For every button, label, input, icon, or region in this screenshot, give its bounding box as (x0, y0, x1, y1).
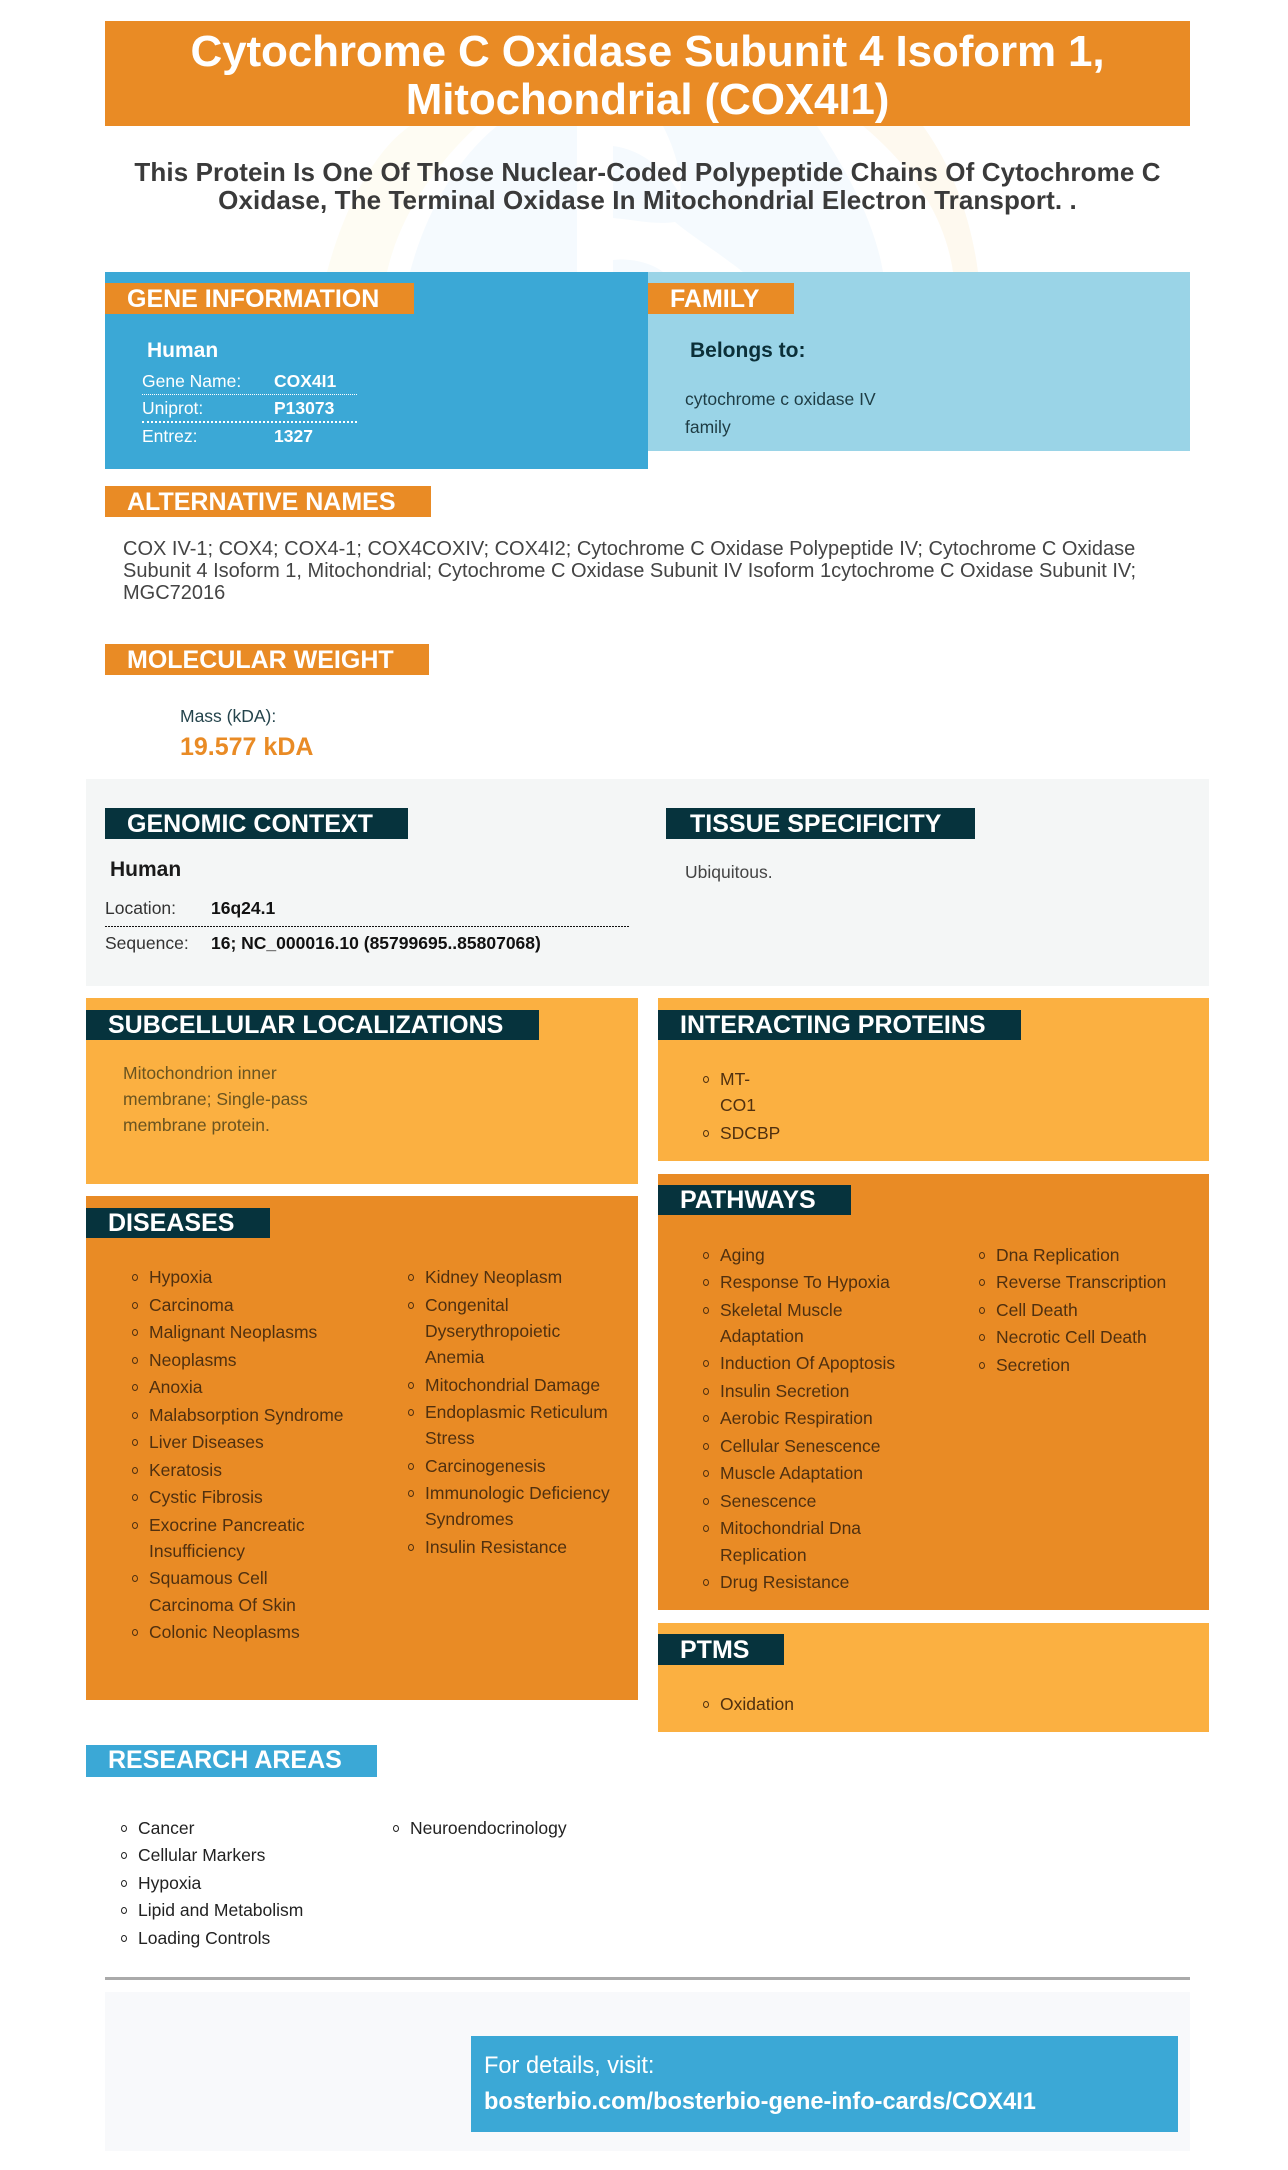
pathway list: Adaptation (720, 1326, 804, 1346)
panel: diseases (86, 1196, 638, 1700)
uniprot row: P13073 (274, 398, 334, 418)
panel: interacting proteins (658, 998, 1209, 1161)
pathway list: Cellular Senescence (720, 1436, 881, 1456)
heading: family (648, 283, 794, 314)
disease list: Insufficiency (149, 1541, 245, 1561)
footer callout (471, 2036, 1178, 2132)
disease list: Keratosis (149, 1460, 222, 1480)
uniprot row: Uniprot: (142, 398, 203, 418)
pathway list: Cell Death (996, 1300, 1078, 1320)
disease list: Malignant Neoplasms (149, 1322, 317, 1342)
disease list: Carcinoma (149, 1295, 234, 1315)
research areas list: Neuroendocrinology (410, 1818, 567, 1838)
subtitle: Oxidase, The Terminal Oxidase In Mitochondrial Electron Transport. . (218, 185, 1077, 215)
research areas list (121, 1818, 567, 1948)
disease list: Exocrine Pancreatic (149, 1515, 305, 1535)
pathway list: Aging (720, 1245, 765, 1265)
disease list: Carcinoma Of Skin (149, 1595, 296, 1615)
mass label: Mass (kDA): (180, 706, 276, 726)
pathway list: Replication (720, 1545, 807, 1565)
disease list (132, 1267, 610, 1642)
sequence row: Sequence: (105, 933, 189, 953)
disease list: Malabsorption Syndrome (149, 1405, 344, 1425)
panel: gene information (105, 272, 648, 469)
research areas list: Cancer (138, 1818, 194, 1838)
protein list: CO1 (720, 1095, 756, 1115)
heading: genomic context: GENOMIC CONTEXT (127, 810, 373, 838)
pathway list: Secretion (996, 1355, 1070, 1375)
subcellular text (123, 1063, 308, 1135)
heading: family: FAMILY (670, 285, 759, 313)
pathway list: Aerobic Respiration (720, 1408, 873, 1428)
disease list: Syndromes (425, 1509, 514, 1529)
gene name row: Gene Name: (142, 371, 241, 391)
heading: research areas: RESEARCH AREAS (108, 1746, 342, 1774)
alternative names text: Subunit 4 Isoform 1, Mitochondrial; Cytochrome C Oxidase Subunit IV Isoform 1cytochrome C Oxidase Subunit IV; (123, 560, 1136, 582)
species label: Human (147, 339, 218, 362)
panel: pathways (658, 1174, 1209, 1610)
mass value: 19.577 kDA (180, 733, 313, 761)
ptm item: Oxidation (720, 1694, 794, 1714)
pathway list: Senescence (720, 1491, 816, 1511)
protein list: SDCBP (720, 1123, 780, 1143)
heading: ptms: PTMS (680, 1636, 749, 1664)
alternative names text: MGC72016 (123, 582, 225, 604)
disease list: Squamous Cell (149, 1568, 268, 1588)
heading: alternative names: ALTERNATIVE NAMES (127, 488, 396, 516)
callout link: bosterbio.com/bosterbio-gene-info-cards/COX4I1 (484, 2089, 1036, 2115)
species label: Human (110, 858, 181, 881)
heading: pathways: PATHWAYS (680, 1186, 816, 1214)
disease list: Anoxia (149, 1377, 203, 1397)
location row: 16q24.1 (211, 898, 275, 918)
disease list: Kidney Neoplasm (425, 1267, 562, 1287)
heading: diseases: DISEASES (108, 1209, 234, 1237)
protein list (703, 1069, 780, 1143)
heading: interacting proteins: INTERACTING PROTEINS (680, 1011, 986, 1039)
belongs to label: Belongs to: (690, 339, 806, 362)
title banner: Mitochondrial (COX4I1) (406, 75, 889, 124)
research areas list: Loading Controls (138, 1928, 270, 1948)
heading: pathways (658, 1185, 851, 1215)
disease list: Cystic Fibrosis (149, 1487, 263, 1507)
panel: ptms (658, 1623, 1209, 1732)
family text: cytochrome c oxidase IV (685, 389, 876, 409)
pathway list: Skeletal Muscle (720, 1300, 843, 1320)
pathway list: Response To Hypoxia (720, 1272, 890, 1292)
heading: molecular weight: MOLECULAR WEIGHT (127, 646, 394, 674)
uniprot row (142, 396, 357, 423)
entrez row: 1327 (274, 426, 313, 446)
pathway list: Dna Replication (996, 1245, 1120, 1265)
location row: Location: (105, 898, 176, 918)
entrez row (142, 426, 313, 446)
disease list: Endoplasmic Reticulum (425, 1402, 608, 1422)
subtitle: This Protein Is One Of Those Nuclear-Coded Polypeptide Chains Of Cytochrome C (134, 157, 1161, 187)
footer panel (105, 1992, 1190, 2151)
pathway list: Necrotic Cell Death (996, 1327, 1147, 1347)
pathway list: Reverse Transcription (996, 1272, 1166, 1292)
disease list: Hypoxia (149, 1267, 212, 1287)
entrez row: Entrez: (142, 426, 197, 446)
tissue text: Ubiquitous. (685, 862, 773, 882)
subcellular text: Mitochondrion inner (123, 1063, 277, 1083)
gene name row (142, 369, 357, 395)
disease list: Carcinogenesis (425, 1456, 546, 1476)
research areas list: Hypoxia (138, 1873, 201, 1893)
alternative names text (123, 538, 1136, 604)
title banner: Cytochrome C Oxidase Subunit 4 Isoform 1, (191, 27, 1104, 76)
gene name row: COX4I1 (274, 371, 336, 391)
disease list: Mitochondrial Damage (425, 1375, 600, 1395)
heading: ptms (658, 1634, 784, 1665)
protein list: MT- (720, 1069, 750, 1089)
alternative names text: COX IV-1; COX4; COX4-1; COX4COXIV; COX4I2; Cytochrome C Oxidase Polypeptide IV; Cytochrome C Oxidase (123, 538, 1135, 560)
heading: gene information: GENE INFORMATION (127, 285, 379, 313)
subtitle (134, 157, 1161, 215)
disease list: Anemia (425, 1347, 484, 1367)
pathway list: Induction Of Apoptosis (720, 1353, 895, 1373)
disease list: Neoplasms (149, 1350, 237, 1370)
disease list: Dyserythropoietic (425, 1321, 560, 1341)
pathway list (703, 1245, 1166, 1592)
family text: family (685, 417, 731, 437)
disease list: Colonic Neoplasms (149, 1622, 300, 1642)
pathway list: Drug Resistance (720, 1572, 849, 1592)
pathway list: Insulin Secretion (720, 1381, 849, 1401)
research areas list: Cellular Markers (138, 1845, 265, 1865)
callout label: For details, visit: (484, 2053, 654, 2079)
research areas list: Lipid and Metabolism (138, 1900, 303, 1920)
pathway list: Muscle Adaptation (720, 1463, 863, 1483)
panel: subcellular localizations (86, 998, 638, 1184)
disease list: Congenital (425, 1295, 509, 1315)
heading: tissue specificity: TISSUE SPECIFICITY (690, 810, 941, 838)
disease list: Liver Diseases (149, 1432, 264, 1452)
disease list: Immunologic Deficiency (425, 1483, 610, 1503)
subcellular text: membrane protein. (123, 1115, 270, 1135)
pathway list: Mitochondrial Dna (720, 1518, 861, 1538)
background watermark (327, 126, 978, 272)
location row (105, 896, 629, 927)
disease list: Insulin Resistance (425, 1537, 567, 1557)
heading: subcellular localizations: SUBCELLULAR LOCALIZATIONS (108, 1011, 503, 1039)
panel: genomic context and tissue specificity (86, 779, 1209, 986)
family text (685, 389, 876, 437)
panel: family (648, 272, 1190, 451)
subcellular text: membrane; Single-pass (123, 1089, 308, 1109)
title banner (105, 21, 1190, 126)
disease list: Stress (425, 1428, 475, 1448)
heading: diseases (86, 1208, 270, 1238)
sequence row: 16; NC_000016.10 (85799695..85807068) (211, 933, 541, 953)
